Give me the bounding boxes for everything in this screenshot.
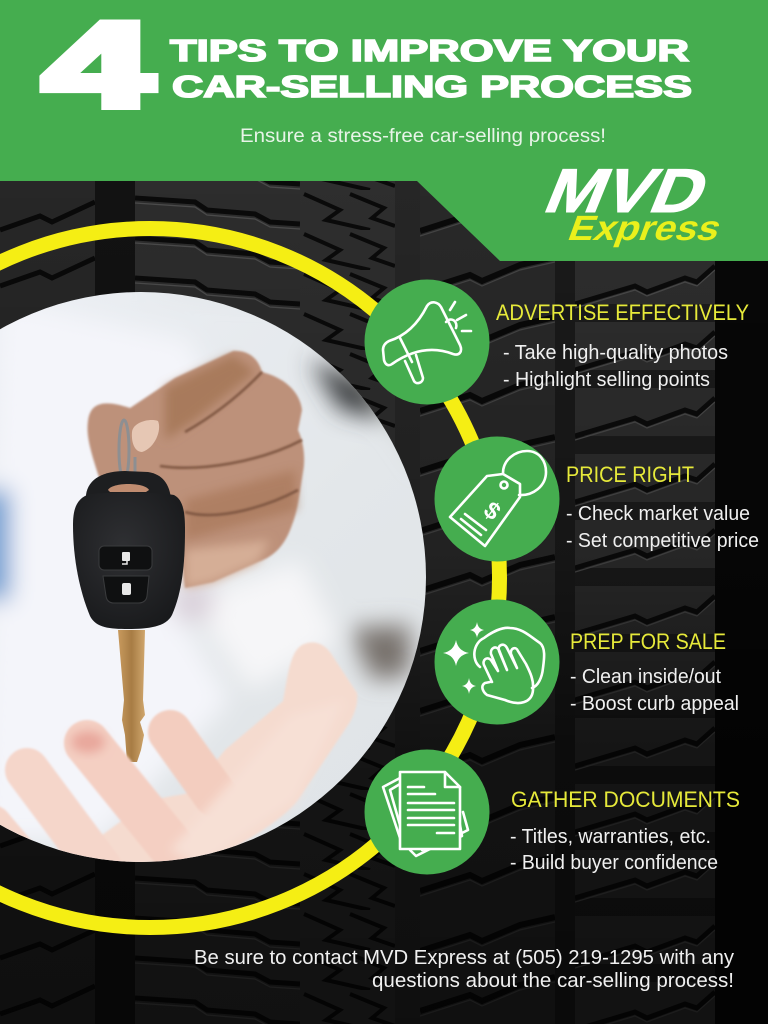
upper hand (88, 351, 304, 588)
title: TIPS TO IMPROVE YOUR (170, 33, 689, 68)
bullet list: - Take high-quality photos (503, 342, 728, 364)
icon: price tag: $ (478, 496, 506, 526)
bullet list (510, 826, 718, 874)
bullet list (570, 666, 739, 715)
logo: MVD Express: Express (563, 208, 728, 248)
bullet list: - Build buyer confidence (510, 852, 718, 874)
step 3: prep for sale (434, 600, 739, 724)
logo: MVD Express (536, 156, 728, 248)
title (170, 33, 692, 104)
logo: MVD Express: MVD (536, 156, 720, 225)
key blade (118, 630, 145, 762)
key fob (73, 471, 185, 629)
background blur shapes (0, 290, 426, 840)
subtitle: Ensure a stress-free car-selling process! (240, 125, 606, 147)
heading: PRICE RIGHT (566, 462, 694, 487)
step 2: price right (434, 436, 759, 562)
key ring (119, 420, 135, 480)
footer contact note: questions about the car-selling process! (372, 970, 734, 992)
footer contact note: Be sure to contact MVD Express at (505) 219-1295 with any (194, 947, 734, 969)
bullet list: - Clean inside/out (570, 666, 721, 688)
icon: cleaning hand with sparkles (434, 600, 560, 724)
bullet list: - Check market value (566, 503, 750, 525)
heading: GATHER DOCUMENTS (511, 787, 740, 812)
bullet list: - Set competitive price (566, 530, 759, 552)
green header banner (0, 0, 768, 261)
heading: PREP FOR SALE (570, 629, 726, 654)
icon: price tag (434, 436, 560, 562)
bullet list: - Highlight selling points (503, 369, 710, 391)
icon: documents (364, 750, 490, 874)
heading: ADVERTISE EFFECTIVELY (496, 300, 749, 325)
icon: megaphone (364, 280, 490, 404)
bullet list (503, 342, 728, 391)
bullet list: - Titles, warranties, etc. (510, 826, 711, 848)
bullet list (566, 503, 759, 552)
bullet list: - Boost curb appeal (570, 693, 739, 715)
photo: key handover (0, 290, 430, 870)
step 4: gather documents (364, 750, 740, 874)
lower hand (0, 642, 357, 870)
step 1: advertise effectively (364, 280, 749, 404)
fob buttons (99, 546, 152, 603)
yellow ring (0, 228, 500, 928)
footer contact note (194, 947, 734, 992)
title: CAR-SELLING PROCESS (172, 69, 692, 104)
big number 4: 4 (43, 0, 153, 132)
